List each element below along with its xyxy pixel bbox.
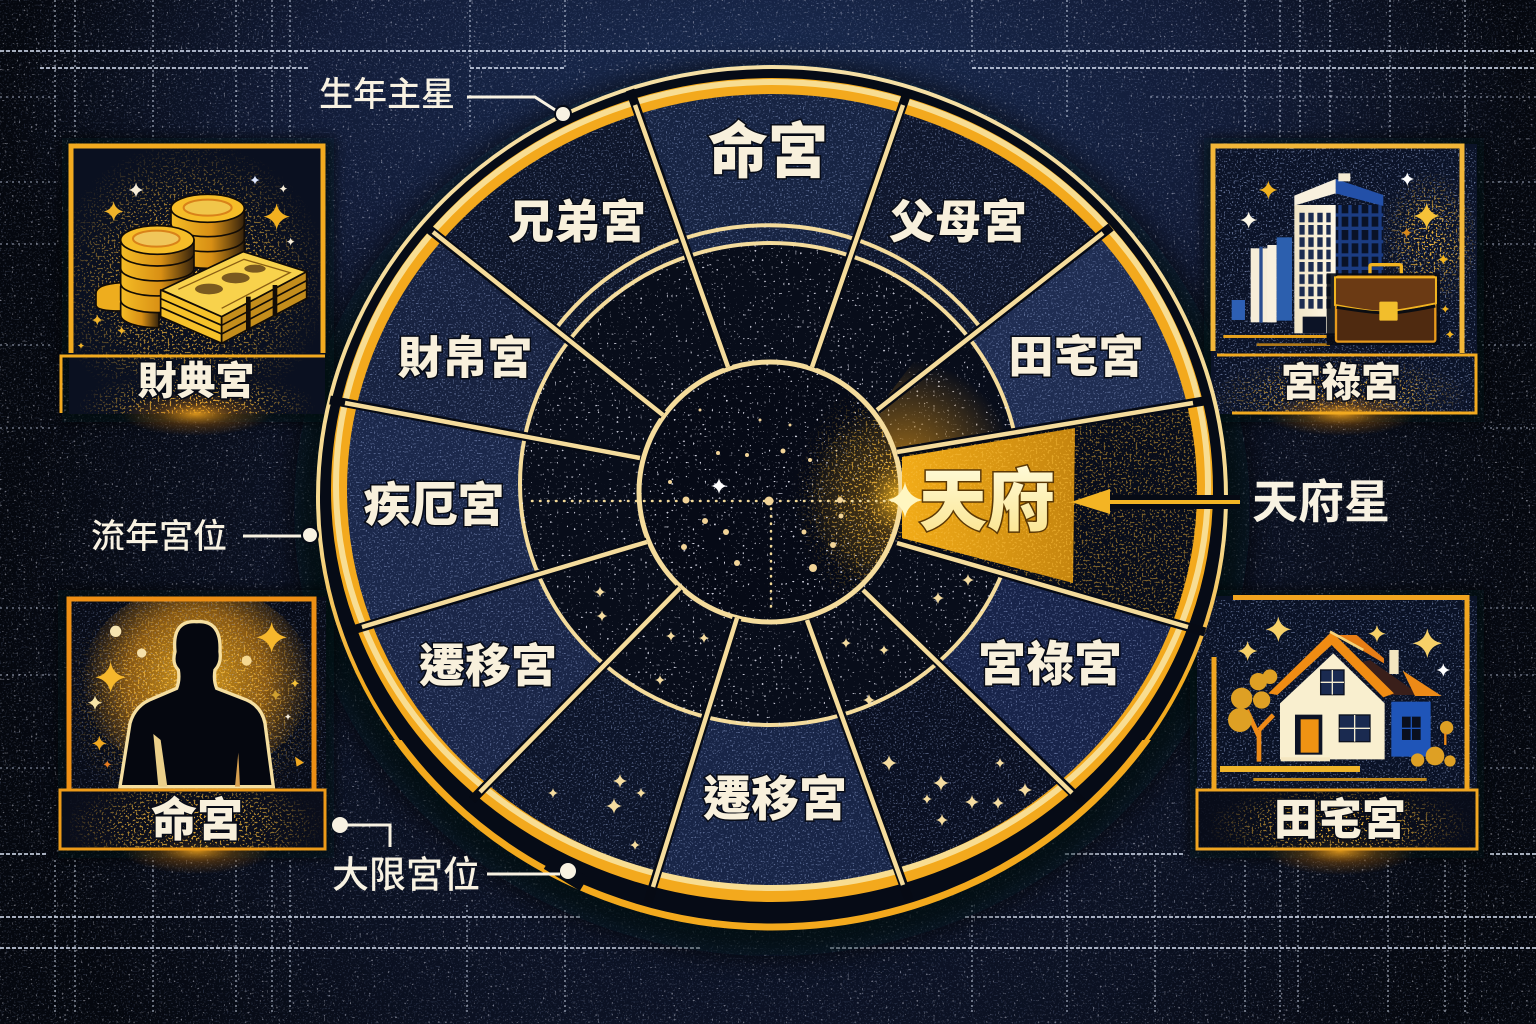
callout: 生年主星 bbox=[319, 76, 571, 122]
middle ring upper arc bbox=[557, 225, 980, 327]
callout: 天府星: 天府星 bbox=[1252, 476, 1390, 528]
panel: career palace bbox=[1204, 138, 1484, 436]
palace label: 兄弟宮: 兄弟宮 bbox=[508, 196, 646, 248]
label bar: 宮祿宮: 宮祿宮 bbox=[1281, 361, 1401, 405]
天府 sector bbox=[897, 408, 1197, 618]
grid: fine horizontal lines bbox=[0, 97, 1536, 768]
icon: office towers and briefcase bbox=[1223, 172, 1454, 346]
callout: 生年主星: 生年主星 bbox=[319, 76, 455, 114]
panel: life palace bbox=[58, 585, 334, 874]
palace label: 遷移宮 bottom: 遷移宮 bbox=[703, 774, 847, 826]
label bar: 財典宮: 財典宮 bbox=[137, 360, 255, 404]
panel: property palace bbox=[1190, 590, 1484, 875]
palace label: 田宅宮: 田宅宮 bbox=[1008, 332, 1144, 382]
palace label: 疾厄宮: 疾厄宮 bbox=[364, 478, 504, 532]
callout: 大限宮位: 大限宮位 bbox=[332, 854, 480, 896]
gold block: 天府 bbox=[887, 425, 1080, 585]
callout: 大限宮位 bbox=[332, 817, 584, 896]
icon: person silhouette bbox=[88, 622, 304, 787]
callout: 流年宮位 bbox=[91, 518, 318, 556]
icon: coins and banknotes bbox=[78, 175, 307, 349]
label bar: 田宅宮 bbox=[1196, 790, 1478, 875]
wheel shadow bbox=[294, 64, 1250, 956]
icon: house with tree bbox=[1220, 617, 1456, 781]
gold block: 天府: 天府 bbox=[919, 464, 1055, 540]
label bar: 田宅宮: 田宅宮 bbox=[1274, 796, 1406, 844]
arrow: 天府星 to 天府 bbox=[1071, 489, 1240, 514]
spokes bbox=[330, 90, 1210, 902]
middle ring disc bbox=[520, 243, 1020, 725]
outer thin ring bbox=[318, 67, 1226, 927]
palace sector fills bbox=[347, 94, 1186, 885]
palace label: 遷移宮 left: 遷移宮 bbox=[419, 640, 557, 692]
callout: 流年宮位: 流年宮位 bbox=[91, 518, 227, 556]
star field of middle band bbox=[520, 240, 1020, 730]
gold glow: 田宅 inner sector bbox=[877, 366, 1001, 451]
gold outer band bbox=[336, 82, 1208, 894]
label bar: 宮祿宮 bbox=[1217, 355, 1476, 436]
palace label: 命宮: 命宮 bbox=[708, 118, 828, 186]
scattered gold stars in the lower sectors bbox=[548, 569, 1032, 850]
icon: sparkle bbox=[887, 482, 923, 518]
palace label: 宮祿宮: 宮祿宮 bbox=[978, 638, 1122, 692]
wheel: twelve-palace chart bbox=[316, 65, 1228, 930]
palace label: 父母宮: 父母宮 bbox=[889, 196, 1027, 248]
label bar: 財典宮 bbox=[59, 356, 325, 436]
label bar: 命宮: 命宮 bbox=[151, 794, 243, 846]
panel: wealth palace bbox=[59, 138, 334, 436]
palace label: 財帛宮: 財帛宮 bbox=[397, 332, 533, 384]
label bar: 命宮 bbox=[59, 790, 326, 874]
inner circle bbox=[530, 360, 902, 624]
